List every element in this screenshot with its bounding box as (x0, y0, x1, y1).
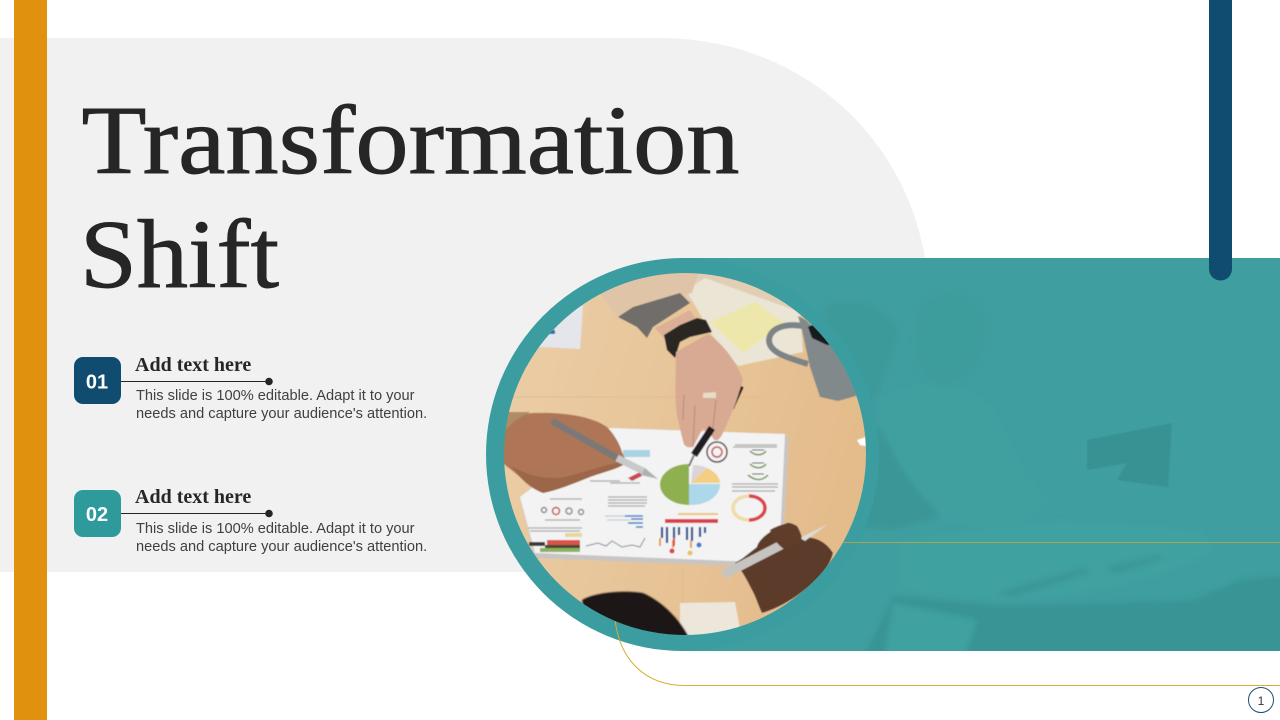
gold curved line (615, 620, 1280, 686)
lower right hand with pen (723, 523, 833, 613)
panel: teal photo band (680, 258, 1280, 665)
title (80, 87, 740, 309)
heatmap (529, 533, 582, 552)
line chart (586, 538, 645, 547)
connector 01 (121, 378, 273, 385)
sticky notes (686, 270, 803, 366)
orange vertical bar (14, 0, 47, 720)
badge 01 number: 01 (86, 372, 108, 394)
dark laptop shape in band (1087, 423, 1172, 487)
report paper (520, 428, 789, 568)
badge 02 (74, 490, 121, 537)
heading 01: Add text here (135, 354, 251, 376)
heading 02: Add text here (135, 486, 251, 508)
badge 01 (74, 357, 121, 404)
badge 02 number: 02 (86, 504, 108, 526)
photo: hands over report (495, 265, 875, 645)
body text 01: This slide is 100% editable. Adapt it to your (136, 388, 415, 404)
panel: gray background (0, 38, 925, 572)
coffee mug (769, 316, 866, 446)
gold horizontal line (840, 542, 1280, 544)
teal circle ring (486, 258, 879, 651)
body text 02 (136, 521, 427, 555)
pie chart (660, 464, 720, 505)
body text 01 (136, 388, 427, 422)
body text 02: This slide is 100% editable. Adapt it to your (136, 521, 415, 537)
title: Shift (80, 201, 279, 309)
navy hanging bar (1209, 0, 1232, 280)
notebook top left (539, 304, 584, 350)
text lines (528, 445, 778, 531)
mini icons (542, 442, 768, 514)
connector 02 (121, 510, 273, 517)
title: Transformation (82, 87, 740, 195)
bar charts (605, 450, 718, 556)
upper hand (600, 268, 743, 466)
body text 01: needs and capture your audience's attention. (136, 406, 427, 422)
body text 02: needs and capture your audience's attention. (136, 539, 427, 555)
page number: 1 (1258, 694, 1265, 708)
page number (1248, 688, 1274, 712)
dark head and notebook at bottom (582, 592, 742, 640)
left hand with pen (503, 412, 658, 493)
donut chart (733, 496, 765, 520)
item 01 (74, 354, 427, 422)
item 02 (74, 486, 427, 555)
